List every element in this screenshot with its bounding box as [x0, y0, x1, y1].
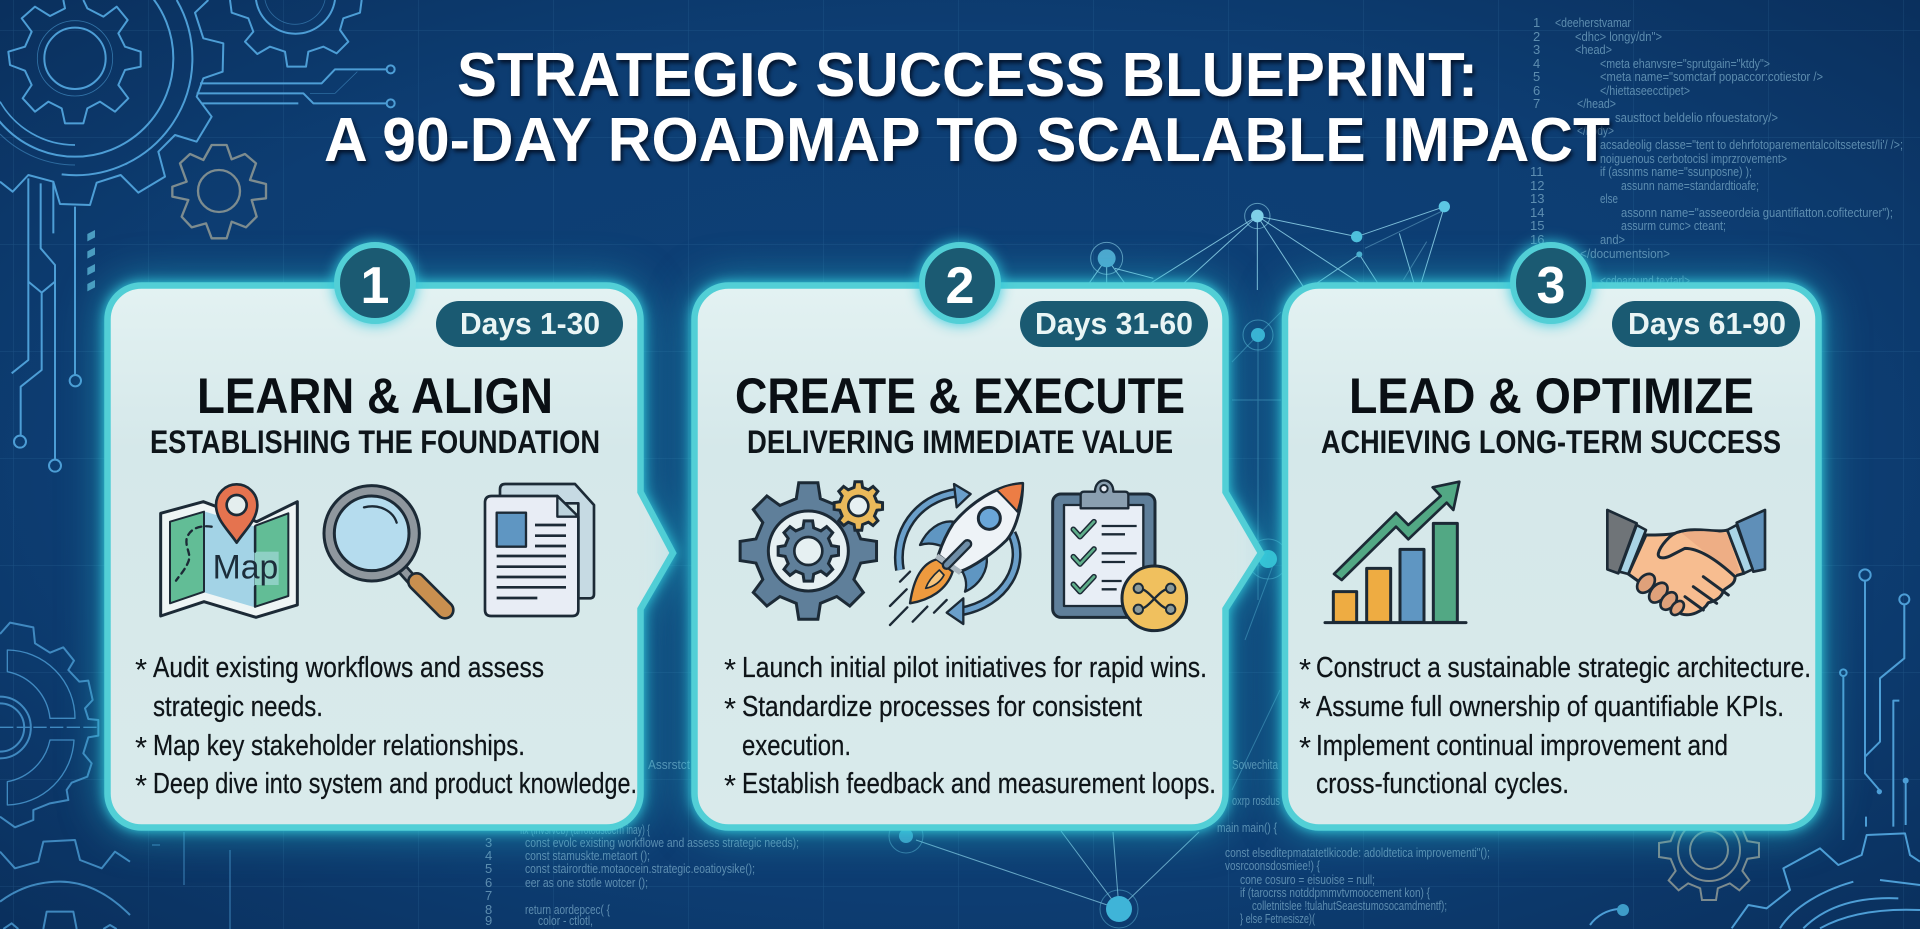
bullet list: step 3: Construct a sustainable strategic architecture. [1316, 652, 1811, 684]
timeframe pill: days 1-30: Days 1-30 [460, 306, 600, 341]
code block top right: and> [1600, 232, 1625, 247]
code block top right: if (assnms name="ssunposne) ); [1600, 164, 1752, 179]
bullet list: step 2: execution. [742, 730, 851, 762]
code block top right: 15 [1530, 218, 1544, 233]
code block top right: <meta ehanvsre="sprutgain="ktdy"> [1600, 56, 1770, 71]
code block top right [1530, 15, 1903, 288]
code block top right: </documentsion> [1580, 246, 1670, 261]
node bottom right [1590, 904, 1629, 925]
icon: documents [485, 484, 594, 616]
circuit lines left [12, 65, 395, 472]
title: A 90-DAY ROADMAP TO SCALABLE IMPACT [324, 106, 1610, 175]
bullet list: step 3 [1299, 652, 1811, 800]
code block top right: 3 [1533, 42, 1540, 57]
bullet list: step 2 [724, 652, 1216, 803]
step number 3 [1513, 245, 1589, 321]
bullet list: step 1: Audit existing workflows and assess [153, 652, 544, 684]
code block bottom center: return aordepcec( { [525, 902, 610, 917]
code block bottom center: 3 [485, 835, 492, 850]
code block bottom center: 4 [485, 848, 492, 863]
code block top right: 12 [1530, 178, 1544, 193]
code block bottom right: vosrcoonsdosmiee!) { [1225, 858, 1321, 873]
bullet list: step 1: * [135, 730, 147, 765]
code block top right: <meta name="somctarf popaccor:cotiestor /> [1600, 69, 1823, 84]
code block bottom right: const elseditepmatatetlkicode: adoldtetica improvementi"(); [1225, 845, 1490, 860]
card shape 3 [1285, 285, 1819, 828]
bullet list: step 2: * [724, 652, 736, 687]
network graph lines [1087, 207, 1444, 290]
icon: map: Map [213, 548, 278, 586]
code block bottom center: const stairordtie.motaocein.strategic.eoatioysike(); [525, 861, 755, 876]
code block top right: 1 [1533, 15, 1540, 30]
panel: step 2 create and execute [694, 245, 1261, 828]
subheading: delivering immediate value: DELIVERING IMMEDIATE VALUE [747, 424, 1173, 460]
code block top right: 5 [1533, 69, 1540, 84]
code block top right: 11 [1530, 164, 1544, 179]
background gears bottom-left [0, 623, 130, 929]
bullet list: step 3: Implement continual improvement and [1316, 730, 1728, 762]
code block bottom center: 9 [485, 913, 492, 928]
subheading: establishing the foundation: ESTABLISHING THE FOUNDATION [150, 424, 600, 460]
bullet list: step 3: Assume full ownership of quantifiable KPIs. [1316, 691, 1784, 723]
code block bottom right: cone cosuro = eisuoise = null; [1240, 872, 1375, 887]
code block top right: </head> [1577, 96, 1616, 111]
code block top right: 16 [1530, 232, 1544, 247]
bullet list: step 2: Launch initial pilot initiatives for rapid wins. [742, 652, 1207, 684]
bullet list: step 3: * [1299, 730, 1311, 765]
code block bottom center: eer as one stotle wotcer (); [525, 875, 648, 890]
timeframe pill: days 1-30 [436, 301, 623, 347]
step number 1: 1 [361, 257, 389, 315]
bullet list: step 2: * [724, 768, 736, 803]
code block top right: <dhc> longy/dn"> [1575, 29, 1662, 44]
bullet list: step 2: Standardize processes for consistent [742, 691, 1142, 723]
code block bottom right: if (tarocrss notddpmmvtvmoocement kon) { [1240, 885, 1431, 900]
bullet list: step 2: * [724, 691, 736, 726]
heading: create and execute: CREATE & EXECUTE [735, 368, 1185, 424]
step number 3: 3 [1537, 257, 1565, 315]
circuit lines right [1840, 569, 1909, 840]
step number 1 [337, 245, 413, 321]
bullet list: step 3: * [1299, 691, 1311, 726]
code block bottom right: colletnitslee !tulahutSeaestumosocamdmentf); [1252, 898, 1447, 913]
bullet list: step 1 [135, 652, 637, 803]
icon: growth bar chart [1325, 482, 1466, 623]
code block bottom center [485, 822, 799, 928]
heading: lead and optimize: LEAD & OPTIMIZE [1349, 368, 1754, 424]
code block top right: </body> [1577, 123, 1614, 138]
code block top right: assurm cumc> cteant; [1621, 218, 1726, 233]
stray code fragments between cards: Assrstct [648, 757, 690, 772]
timeframe pill: days 61-90: Days 61-90 [1628, 306, 1786, 341]
small circuits below card 1 [152, 832, 230, 929]
timeframe pill: days 61-90 [1612, 301, 1800, 347]
code block top right: 14 [1530, 205, 1544, 220]
icon: gears [740, 482, 883, 619]
panel: step 1 learn and align [107, 245, 673, 828]
stray code fragments between cards: oxrp rosdus [1232, 793, 1280, 808]
code block bottom right: } else Fetnesisze)( [1240, 911, 1315, 926]
step number 2 [922, 245, 998, 321]
title [324, 41, 1610, 175]
card shape 1 [107, 285, 673, 828]
code block top right: 2 [1533, 29, 1540, 44]
heading: learn and align: LEARN & ALIGN [197, 368, 553, 424]
code block top right: <deeherstvamar [1555, 15, 1632, 30]
background gears top-left [0, 0, 362, 205]
code block bottom center: 7 [485, 888, 492, 903]
small grey gear [172, 145, 266, 238]
background gear bottom right [1732, 833, 1920, 928]
bullet list: step 2: Establish feedback and measurement loops. [742, 768, 1216, 800]
code block bottom right: main main() { [1217, 820, 1278, 835]
timeframe pill: days 31-60 [1020, 301, 1208, 347]
code block bottom right [1217, 820, 1490, 926]
bullet list: step 1: strategic needs. [153, 691, 323, 723]
code block top right: <head> [1575, 42, 1612, 57]
code block top right: 4 [1533, 56, 1540, 71]
code block top right: sausttoct beldelio nfouestatory/> [1615, 110, 1778, 125]
icon: clipboard checklist [1053, 480, 1187, 631]
code block top right: else [1600, 191, 1618, 206]
icon: map [161, 484, 297, 617]
icon: rocket with circular arrows [890, 483, 1023, 625]
grey gear bottom right [1659, 800, 1759, 900]
timeframe pill: days 31-60: Days 31-60 [1035, 306, 1193, 341]
bullet list: step 1: Deep dive into system and product knowledge. [153, 768, 637, 800]
code block top right: noiguenous cerbotocisl imprzrovement> [1600, 151, 1787, 166]
subheading: achieving long-term success: ACHIEVING LONG-TERM SUCCESS [1321, 424, 1781, 460]
circuit dashes [87, 230, 95, 291]
code block top right: </hiettaseecctipet> [1600, 83, 1690, 98]
network nodes [889, 201, 1450, 928]
code block bottom center: color - ctlotl, [538, 913, 593, 928]
code block top right: 6 [1533, 83, 1540, 98]
code block bottom center: 5 [485, 861, 492, 876]
icon: magnifying glass [324, 486, 445, 610]
step number 2: 2 [946, 257, 974, 315]
card shape 2 [694, 285, 1261, 828]
code block bottom center: 8 [485, 902, 492, 917]
bullet list: step 1: * [135, 652, 147, 687]
code block bottom center: const evolc existing workflowe and assess strategic needs); [525, 835, 799, 850]
code block top right: <cdoaround textarl> [1600, 273, 1690, 288]
code block bottom center: const stamuskte.metaort (); [525, 848, 650, 863]
stray code fragments between cards: Sowechita [1232, 757, 1279, 772]
title: STRATEGIC SUCCESS BLUEPRINT: [457, 41, 1478, 110]
icon: handshake [1607, 510, 1765, 618]
bullet list: step 1: Map key stakeholder relationships. [153, 730, 525, 762]
code block bottom center: fix (invsrveb) (arrotoustoern inay) { [520, 822, 650, 837]
bullet list: step 3: cross-functional cycles. [1316, 768, 1569, 800]
code block bottom center: 6 [485, 875, 492, 890]
code block top right: 13 [1530, 191, 1544, 206]
panel: step 3 lead and optimize [1285, 245, 1819, 828]
stray code fragments between cards [648, 757, 1280, 808]
bullet list: step 3: * [1299, 652, 1311, 687]
code block top right: 7 [1533, 96, 1540, 111]
code block top right: assunn name=standardtioafe; [1621, 178, 1759, 193]
bullet list: step 1: * [135, 768, 147, 803]
